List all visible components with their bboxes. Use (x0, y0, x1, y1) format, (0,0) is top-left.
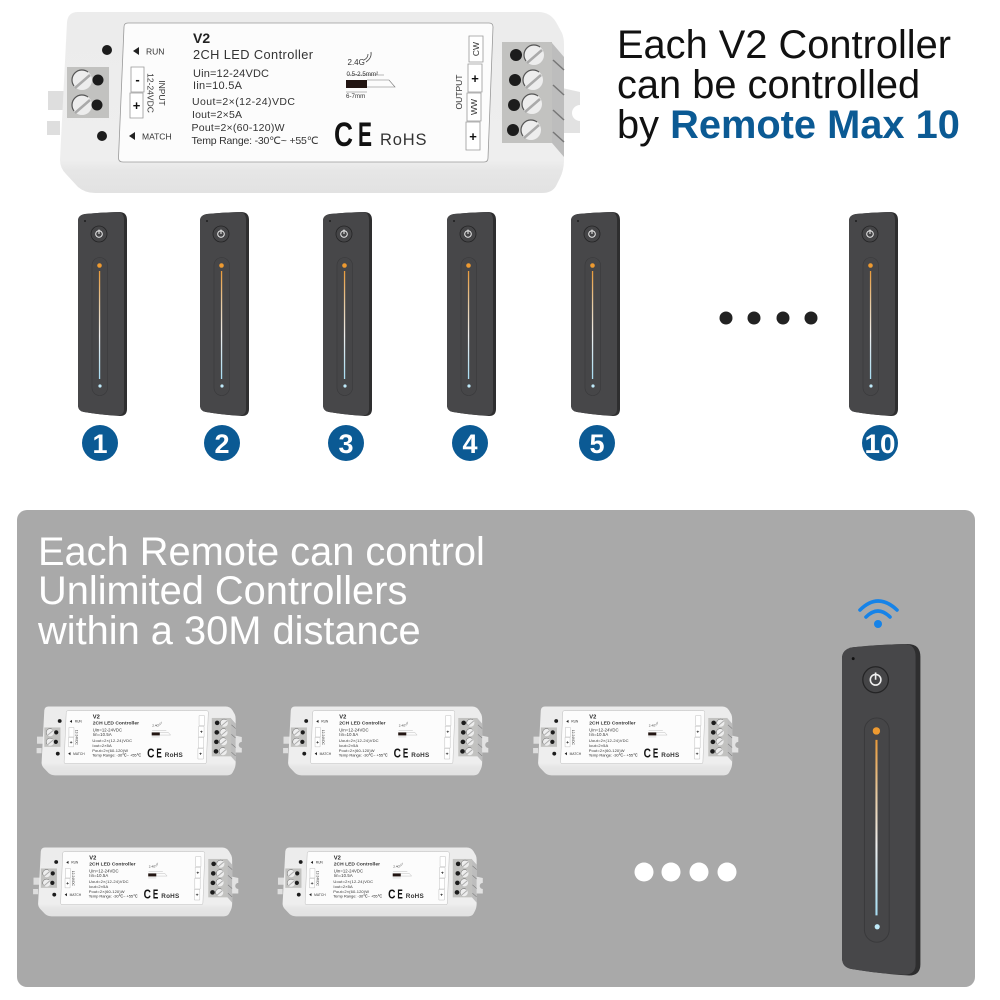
small controller 5: RoHS (406, 893, 424, 900)
number badges: 4 (462, 429, 478, 459)
main controller product: V2 (193, 30, 210, 46)
small controller 2 (283, 707, 488, 775)
main controller product: + (133, 98, 141, 113)
heading: each controller, max 10 remotes: by Remote Max 10 (617, 103, 960, 147)
main controller product: MATCH (142, 132, 172, 142)
number badges: 2 (214, 429, 230, 459)
main controller product: 12-24VDC (146, 73, 156, 113)
small controller 5 (278, 848, 483, 916)
main controller product: 0.5-2.5mm² (346, 71, 378, 78)
small controller 4: + (196, 894, 199, 899)
remote 3 (323, 212, 372, 416)
small controller 1: + (70, 741, 73, 746)
small controller 3: E (653, 746, 658, 760)
small controller 1: Temp Range: -30℃~ +55℃ (92, 753, 142, 758)
small controller 4: E (153, 887, 158, 901)
small controller 3: RoHS (661, 752, 679, 759)
small controller 1: Iin=10.5A (93, 732, 112, 737)
small controller 3: Iin=10.5A (589, 732, 608, 737)
main controller product: Iin=10.5A (193, 80, 243, 92)
small controller 3: 12-24VDC (571, 730, 575, 746)
remote 2 (200, 212, 249, 416)
small controller 3: 2.4G (649, 724, 656, 728)
small controller 1: Uin=12-24VDC (93, 727, 122, 732)
small controller 5: MATCH (314, 893, 326, 897)
small controller 1: + (199, 753, 202, 758)
small controller 2: MATCH (320, 752, 332, 756)
small controller 5: Temp Range: -30℃~ +55℃ (333, 894, 383, 899)
small controller 5: 12-24VDC (315, 871, 319, 887)
small controller 5: C (388, 887, 396, 901)
small controller 3 (533, 707, 738, 775)
small controller 2: E (403, 746, 408, 760)
small controller 1: C (147, 746, 155, 760)
small controller 3: Pout=2×(60-120)W (589, 748, 625, 753)
main controller product: 6-7mm (346, 93, 365, 100)
main controller product: Uout=2×(12-24)VDC (192, 96, 295, 108)
white ellipsis dots (634, 862, 736, 882)
small controller 5: Iout=2×5A (333, 884, 353, 889)
small controller 2: Uout=2×(12-24)VDC (339, 738, 379, 743)
small controller 5: V2 (334, 855, 341, 861)
small controller 5: Uin=12-24VDC (334, 868, 363, 873)
small controller 1: Iout=2×5A (92, 743, 112, 748)
small controller 4: RoHS (161, 893, 179, 900)
small controller 2: C (394, 746, 401, 760)
small controller 2: Iin=10.5A (339, 732, 358, 737)
small controller 2: Pout=2×(60-120)W (339, 748, 375, 753)
main controller product: 2CH LED Controller (193, 47, 314, 62)
small controller 3: RUN (571, 720, 579, 724)
small controller 4: 2CH LED Controller (89, 861, 136, 867)
small controller 4: Uin=12-24VDC (89, 868, 119, 873)
small controller 1: 2CH LED Controller (93, 720, 139, 726)
small controller 4: RUN (71, 861, 79, 865)
small controller 2: + (316, 741, 319, 746)
small controller 1: MATCH (73, 752, 85, 756)
main controller product: Uin=12-24VDC (193, 68, 269, 80)
small controller 1: + (200, 731, 203, 736)
remote 10 (849, 212, 898, 416)
main controller product: + (469, 129, 477, 144)
heading: each controller, max 10 remotes (617, 23, 960, 147)
small controller 5: + (440, 894, 443, 899)
panel heading (37, 530, 485, 653)
main controller product: WW (469, 99, 479, 115)
small controller 2: V2 (339, 714, 346, 720)
small controller 2: 12-24VDC (321, 730, 325, 746)
small controller 1: 12-24VDC (74, 730, 78, 746)
small controller 2: 2CH LED Controller (339, 720, 386, 726)
small controller 1: Pout=2×(60-120)W (92, 748, 128, 753)
main controller product: - (135, 72, 140, 87)
small controller 4: Uout=2×(12-24)VDC (89, 879, 129, 884)
small controller 3: + (696, 731, 699, 736)
small controller 4: Iout=2×5A (89, 884, 109, 889)
small controller 3: C (644, 746, 651, 760)
large remote (842, 644, 920, 976)
main controller product: CW (471, 42, 481, 56)
main controller product: Temp Range: -30℃~ +55℃ (192, 135, 319, 147)
main controller product: RoHS (380, 131, 426, 149)
remote 4 (447, 212, 496, 416)
remote 5 (571, 212, 620, 416)
number badges: 3 (338, 429, 354, 459)
small controller 5: Uout=2×(12-24)VDC (333, 879, 373, 884)
ellipsis dots between remotes (720, 312, 818, 324)
small controller 3: Uin=12-24VDC (589, 727, 619, 732)
panel: unlimited controllers (17, 510, 975, 987)
small controller 2: Temp Range: -30℃~ +55℃ (339, 753, 388, 758)
main controller product: + (471, 71, 479, 86)
small controller 1: 2.4G (152, 724, 160, 728)
small controller 3: 2CH LED Controller (589, 720, 636, 726)
small controller 5: Pout=2×(60-120)W (333, 889, 369, 894)
panel heading: Each Remote can control (38, 530, 485, 574)
number badges (82, 425, 898, 461)
small controller 5: Iin=10.5A (334, 873, 353, 878)
main controller product: Iout=2×5A (192, 109, 242, 121)
small controller 1 (37, 707, 242, 775)
small controller 4 (33, 848, 238, 916)
small controller 5: E (397, 887, 403, 901)
main controller product: Pout=2×(60-120)W (192, 122, 285, 134)
main controller product: E (358, 116, 372, 154)
small controller 2: + (446, 753, 449, 758)
small controller 5: 2CH LED Controller (334, 861, 380, 867)
panel heading: Unlimited Controllers (38, 569, 407, 613)
small controller 4: C (144, 887, 151, 901)
small controller 5: 2.4G (393, 865, 401, 869)
main controller product: C (334, 116, 353, 154)
icon: wifi signal (860, 601, 897, 628)
small controller 3: Temp Range: -30℃~ +55℃ (589, 753, 638, 758)
small controller 4: + (196, 872, 199, 877)
small controller 4: 2.4G (149, 865, 156, 869)
small controller 1: E (156, 746, 162, 760)
number badges: 1 (92, 429, 108, 459)
small controller 2: 2.4G (399, 724, 406, 728)
small controller 1: RUN (75, 720, 82, 724)
small controller 2: RUN (321, 720, 329, 724)
panel heading: within a 30M distance (37, 609, 421, 653)
small controller 5: + (311, 882, 314, 887)
small controller 2: RoHS (411, 752, 429, 759)
small controller 1: RoHS (165, 752, 183, 759)
small controller 5: + (441, 872, 444, 877)
small controller 2: Uin=12-24VDC (339, 727, 369, 732)
number badges: 5 (589, 429, 605, 459)
small controller 3: Iout=2×5A (589, 743, 609, 748)
small controller 3: + (696, 753, 699, 758)
small controller 4: V2 (89, 855, 96, 861)
small controller 2: + (446, 731, 449, 736)
main controller product: 2.4G (348, 58, 365, 67)
main controller product: RUN (146, 46, 164, 56)
small controller 3: V2 (589, 714, 596, 720)
small controller 1: V2 (93, 714, 100, 720)
main controller product: OUTPUT (454, 75, 464, 109)
number badges: 10 (864, 429, 896, 459)
small controller 5: RUN (316, 861, 323, 865)
small controller 4: Temp Range: -30℃~ +55℃ (89, 894, 138, 899)
small controller 3: MATCH (570, 752, 582, 756)
small controller 4: + (66, 882, 69, 887)
small controller 4: Iin=10.5A (89, 873, 108, 878)
small controller 3: Uout=2×(12-24)VDC (589, 738, 629, 743)
main controller product: INPUT (157, 80, 167, 106)
main controller product (47, 12, 580, 193)
small controller 4: Pout=2×(60-120)W (89, 889, 125, 894)
small controller 2: Iout=2×5A (339, 743, 359, 748)
small controller 1: Uout=2×(12-24)VDC (92, 738, 132, 743)
small controller 4: 12-24VDC (71, 871, 75, 887)
heading: each controller, max 10 remotes: Each V2 Controller (617, 23, 951, 67)
small controller 3: + (566, 741, 569, 746)
remote 1 (78, 212, 127, 416)
heading: each controller, max 10 remotes: can be controlled (617, 63, 920, 107)
small controller 4: MATCH (70, 893, 82, 897)
